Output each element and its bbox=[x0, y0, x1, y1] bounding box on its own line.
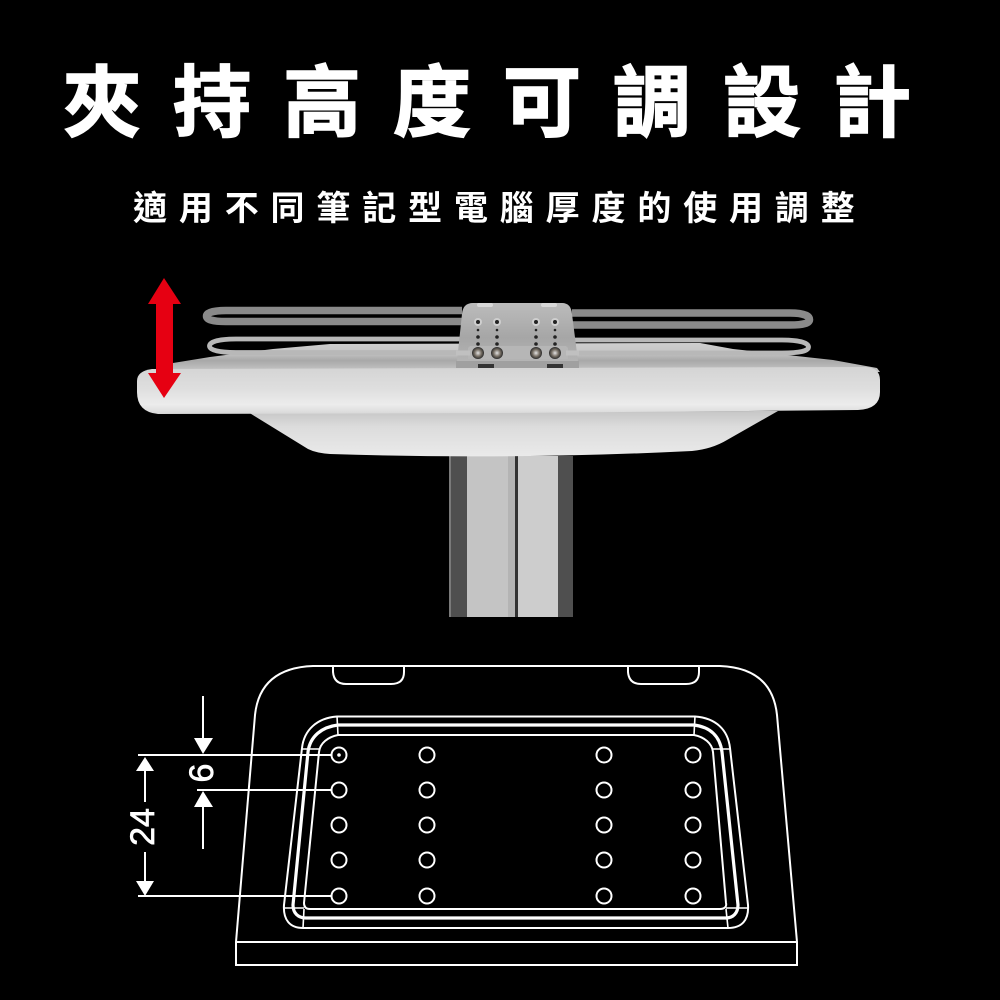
dimension: 6: 6 bbox=[183, 764, 221, 782]
title: 夾持高度可調設計 bbox=[63, 59, 943, 147]
subtitle: 適用不同筆記型電腦厚度的使用調整 bbox=[133, 190, 867, 228]
right notch bbox=[628, 666, 699, 684]
upper rack wire bbox=[206, 310, 810, 325]
tabletop underside bbox=[248, 411, 778, 456]
recess inner ring bbox=[304, 735, 726, 909]
clamp bracket bbox=[456, 303, 579, 368]
photo: adjustable laptop stand bbox=[137, 303, 880, 617]
pillar bbox=[449, 456, 573, 617]
lower rack wire bbox=[210, 339, 808, 353]
recess middle thick ring bbox=[293, 725, 738, 918]
mounting holes bbox=[332, 748, 700, 904]
tabletop upper surface bbox=[150, 343, 880, 372]
lower wire ends bbox=[456, 350, 579, 356]
screws bbox=[472, 347, 561, 359]
tray outline bbox=[236, 666, 797, 965]
corner ticks bbox=[284, 716, 748, 928]
dimension: 6 bbox=[183, 696, 331, 849]
tabletop front face bbox=[137, 367, 880, 414]
line drawing: top view of the tray bbox=[236, 666, 797, 965]
icon: red double arrow bbox=[148, 278, 181, 398]
dimension: 24 bbox=[124, 755, 331, 896]
left notch bbox=[333, 666, 404, 684]
recess outer ring bbox=[284, 716, 748, 928]
dimension: 24: 24 bbox=[124, 808, 162, 846]
adjustment holes bbox=[474, 318, 559, 326]
